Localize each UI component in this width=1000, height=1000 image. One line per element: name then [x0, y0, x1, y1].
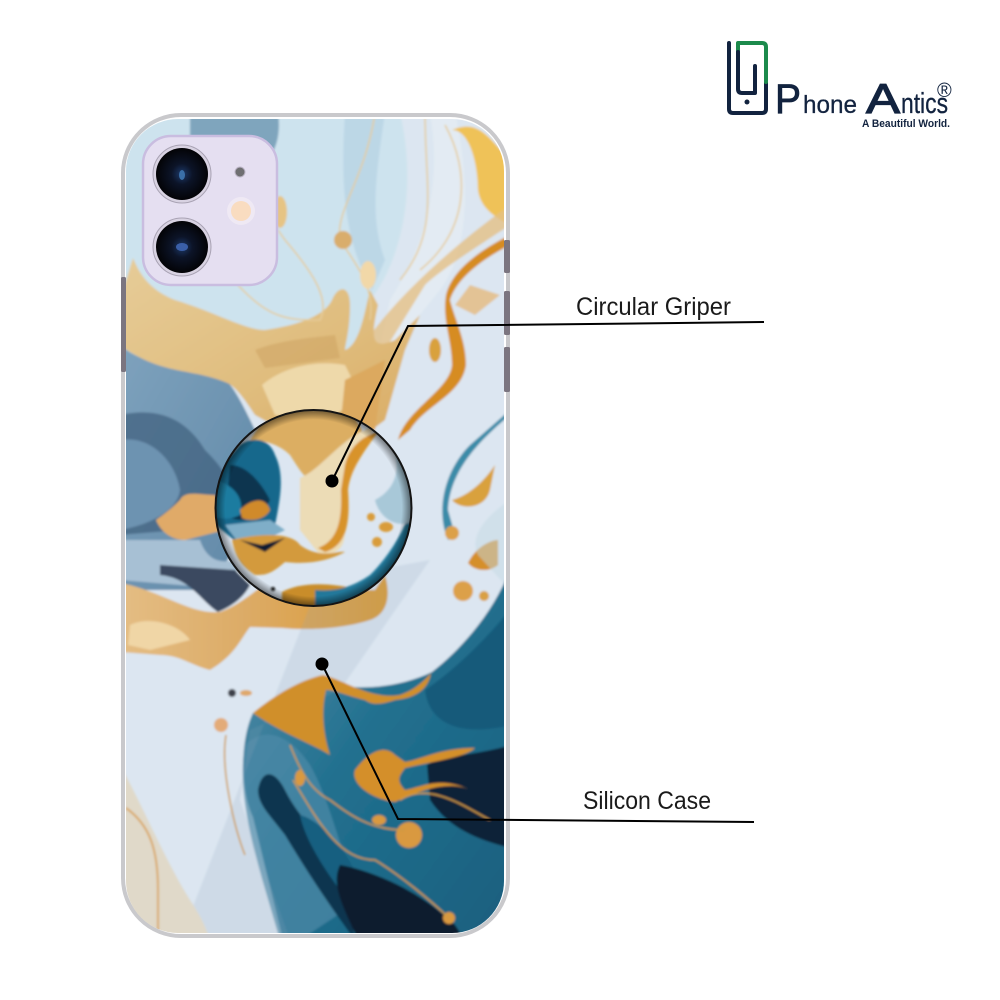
logo: Phone Antics — [729, 43, 952, 130]
gold edge top right — [452, 125, 504, 222]
lower gold pour — [120, 575, 388, 670]
logo wordmark: hone — [803, 91, 857, 119]
camera module — [143, 136, 277, 285]
case frame — [123, 115, 508, 936]
right side gold drops and veins — [442, 410, 510, 540]
logo wordmark: P — [775, 75, 801, 122]
logo wordmark: A — [866, 75, 900, 122]
orange ribbon — [398, 235, 510, 440]
logo wordmark — [775, 75, 952, 130]
bottom left cream — [126, 774, 208, 933]
callout: circular griper leader — [326, 322, 764, 488]
label: silicon case: Silicon Case — [583, 787, 711, 815]
flash — [227, 197, 255, 225]
teal lower area — [243, 570, 510, 940]
label: circular griper: Circular Griper — [576, 293, 731, 321]
left gold knot — [156, 494, 225, 540]
logo wordmark: A Beautiful World. — [862, 118, 950, 130]
circular griper — [210, 410, 415, 610]
marble artwork — [120, 113, 510, 940]
steel blue left panel — [120, 345, 260, 590]
icon: phone mark — [729, 43, 766, 113]
upper lens — [153, 145, 211, 203]
callout: silicon case leader — [316, 658, 754, 822]
lower lens — [153, 218, 211, 276]
big gold pour — [126, 258, 420, 428]
pale blue upper area — [126, 119, 407, 348]
thin gold veins — [225, 735, 490, 918]
microphone — [235, 167, 245, 177]
logo wordmark: ® — [937, 80, 952, 102]
logo wordmark: ntics — [901, 88, 948, 120]
glare wedge — [180, 560, 430, 940]
dark navy swirl — [258, 774, 355, 940]
gold flow across teal — [253, 673, 431, 755]
phone case — [120, 113, 510, 940]
side buttons — [121, 240, 510, 392]
